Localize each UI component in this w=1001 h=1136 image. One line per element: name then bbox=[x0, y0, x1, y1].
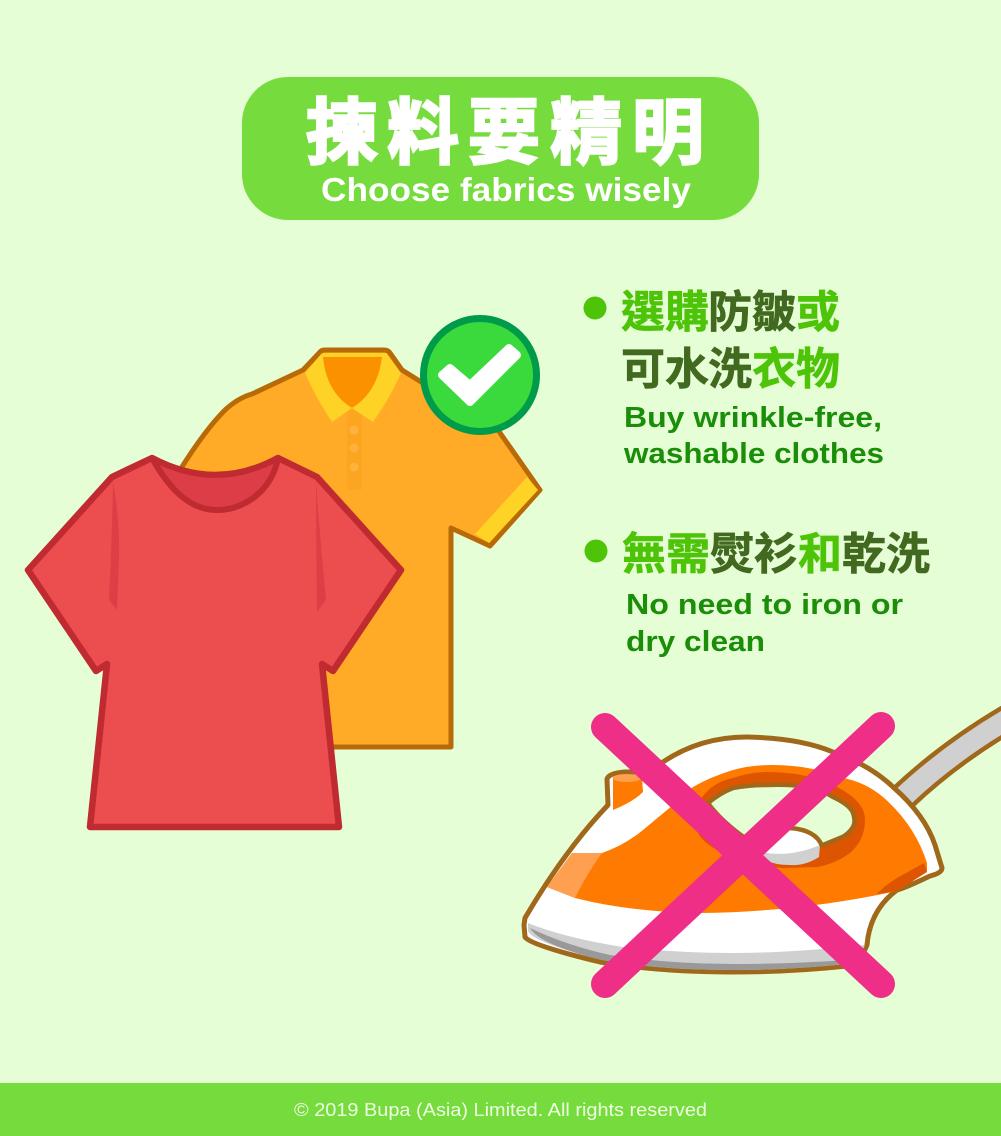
t-shirt neck rim bbox=[152, 458, 278, 510]
footer bar bbox=[0, 1083, 1001, 1136]
iron shell bbox=[524, 737, 942, 972]
iron cord bbox=[892, 702, 1001, 806]
title: Chinese: 揀料要精明 bbox=[306, 94, 704, 174]
copyright text: © 2019 Bupa (Asia) Limited. All rights reserved bbox=[294, 1100, 707, 1120]
heading line 1: 選購防皺或 bbox=[621, 288, 840, 337]
iron knob bbox=[613, 778, 643, 810]
iron orange band bbox=[547, 765, 927, 913]
polo neck opening bbox=[323, 356, 382, 408]
iron sole grey bbox=[528, 923, 865, 970]
banner pill bbox=[242, 77, 759, 220]
bullet dot bbox=[584, 296, 606, 320]
polo buttons bbox=[350, 426, 358, 472]
English line 2: washable clothes bbox=[623, 438, 884, 470]
iron dial edge bbox=[760, 845, 820, 865]
polo body bbox=[180, 350, 540, 747]
bullet 2 text bbox=[584, 530, 930, 658]
polo sleeve cuff bbox=[475, 477, 538, 543]
footer bbox=[0, 1083, 1001, 1136]
t-shirt fold left bbox=[109, 480, 119, 610]
title banner bbox=[242, 77, 759, 220]
bullet 1 text bbox=[584, 288, 884, 470]
English line 1: No need to iron or bbox=[626, 589, 903, 621]
iron dial top outline bbox=[775, 828, 822, 846]
title: English: Choose fabrics wisely bbox=[321, 171, 692, 208]
English line 1: Buy wrinkle-free, bbox=[624, 402, 882, 434]
illustration: polo shirt bbox=[180, 350, 540, 747]
iron dark shadow bbox=[877, 863, 927, 894]
t-shirt body bbox=[28, 458, 401, 827]
iron handle dark rim bbox=[696, 772, 865, 868]
bullet dot bbox=[584, 540, 608, 562]
icon: green check badge bbox=[424, 318, 536, 432]
iron handle hole bbox=[708, 785, 854, 845]
iron light highlight bbox=[547, 853, 602, 898]
iron dial bbox=[752, 829, 821, 855]
English line 2: dry clean bbox=[626, 626, 765, 658]
iron sole shadow bbox=[530, 928, 847, 970]
illustration: iron bbox=[524, 702, 1001, 972]
icon: pink cross bbox=[605, 726, 881, 984]
heading line 2: 可水洗衣物 bbox=[621, 345, 840, 394]
t-shirt fold right bbox=[316, 480, 326, 612]
polo placket bbox=[347, 409, 362, 490]
heading: 無需熨衫和乾洗 bbox=[622, 530, 930, 579]
polo collar left bbox=[305, 353, 352, 422]
t-shirt inner neck bbox=[152, 458, 278, 510]
iron knob top bbox=[612, 774, 642, 782]
polo collar top edge bbox=[323, 353, 387, 357]
illustration: red t-shirt bbox=[28, 458, 401, 827]
polo collar right bbox=[352, 353, 401, 422]
